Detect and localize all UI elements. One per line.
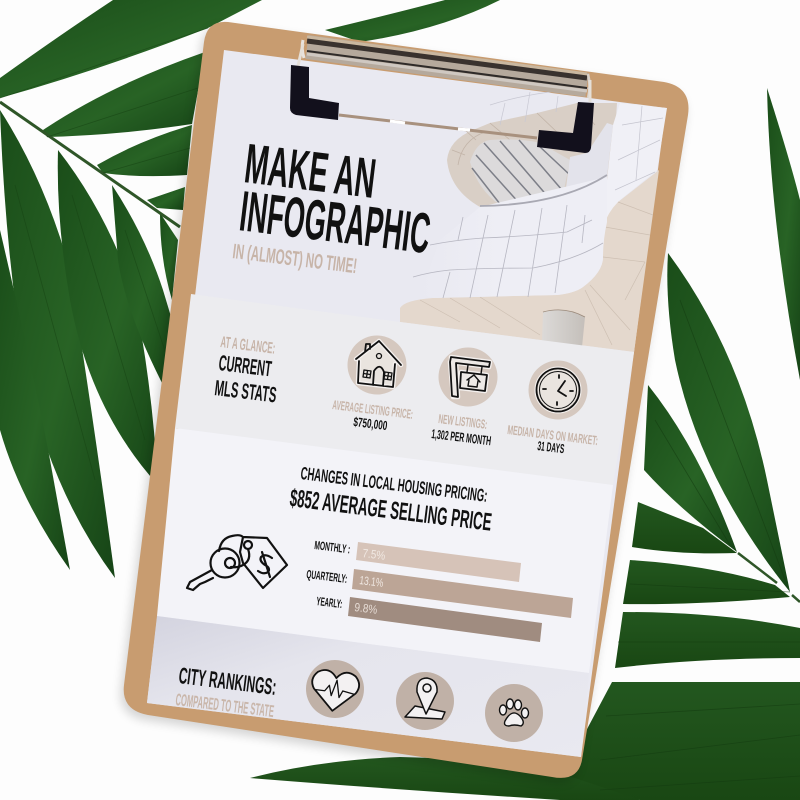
- lower beige wall: [400, 170, 659, 352]
- upper tile lines: [490, 88, 590, 125]
- pricing heading: [288, 463, 493, 537]
- bar: yearly: 9.8%: [354, 600, 378, 617]
- stat: average listing price: [332, 397, 414, 433]
- city rankings heading: CITY RANKINGS:: [177, 662, 278, 700]
- infographic paper: [147, 50, 667, 757]
- stat: new listings: NEW LISTINGS:: [438, 411, 488, 432]
- slatted opening: [470, 139, 570, 205]
- icon: clock: [528, 360, 588, 420]
- bar: quarterly: QUARTERLY:: [306, 567, 348, 586]
- bar: monthly: MONTHLY :: [314, 538, 351, 556]
- bar chart: price changes: [306, 538, 573, 642]
- column: [565, 123, 613, 196]
- beige tiled ring: [447, 103, 617, 207]
- white tiled corner: [607, 103, 667, 220]
- clipboard board: [121, 22, 688, 783]
- bar: monthly: 7.5%: [362, 546, 386, 563]
- icon: key and price tag: [187, 535, 287, 590]
- title: [236, 131, 434, 266]
- curved tile wall: [420, 177, 607, 298]
- metal bar: [302, 37, 590, 98]
- stat: median days on market: 31 DAYS: [537, 438, 565, 456]
- at a glance heading: AT A GLANCE:: [220, 334, 276, 358]
- stat: new listings: [431, 411, 492, 448]
- at a glance heading: MLS STATS: [213, 375, 278, 408]
- bar: monthly: [314, 538, 521, 582]
- foliage: left palm leaves: [0, 0, 500, 578]
- bar: yearly: YEARLY:: [316, 594, 343, 611]
- bar: quarterly: [306, 567, 573, 618]
- title: MAKE AN: [242, 131, 379, 210]
- right bracket: [537, 102, 594, 153]
- icon: map pin: [396, 672, 454, 730]
- bar: yearly: [316, 594, 542, 642]
- stat: median days on market: [507, 422, 599, 456]
- stat: new listings: 1,302 PER MONTH: [431, 426, 492, 448]
- pricing heading: CHANGES IN LOCAL HOUSING PRICING:: [300, 463, 489, 506]
- panel: city rankings: [147, 616, 589, 757]
- cylinder column: [542, 310, 585, 347]
- paper base: [147, 50, 666, 757]
- panel: city rankings: COMPARED TO THE STATE: [175, 690, 275, 721]
- pricing heading: $852 AVERAGE SELLING PRICE: [288, 484, 493, 537]
- subtitle: IN (ALMOST) NO TIME!: [231, 240, 358, 278]
- icon: for sale sign: [438, 348, 498, 406]
- left wire arm: [298, 44, 590, 102]
- at a glance heading: [213, 334, 278, 408]
- stat: average listing price: $750,000: [353, 414, 388, 433]
- hero photo: architecture: [400, 88, 667, 352]
- icon: paw print: [485, 684, 543, 742]
- panel: MLS stats band: AVERAGE LISTING PRICE:: [332, 397, 414, 422]
- clip: metal bar and black brackets: [290, 37, 594, 153]
- panel: MLS stats band: [175, 294, 634, 485]
- wire: [339, 115, 537, 138]
- left bracket: [290, 65, 339, 120]
- icon: house: [348, 336, 406, 394]
- icon: heart: [303, 657, 367, 721]
- infographic paper: INFOGRAPHIC: [236, 179, 434, 266]
- foliage: right palm leaves: [250, 88, 800, 800]
- at a glance heading: CURRENT: [217, 350, 273, 381]
- bar: quarterly: 13.1%: [359, 573, 384, 590]
- stat: median days on market: MEDIAN DAYS ON MARKET:: [507, 422, 599, 448]
- panel: housing pricing: [157, 428, 613, 673]
